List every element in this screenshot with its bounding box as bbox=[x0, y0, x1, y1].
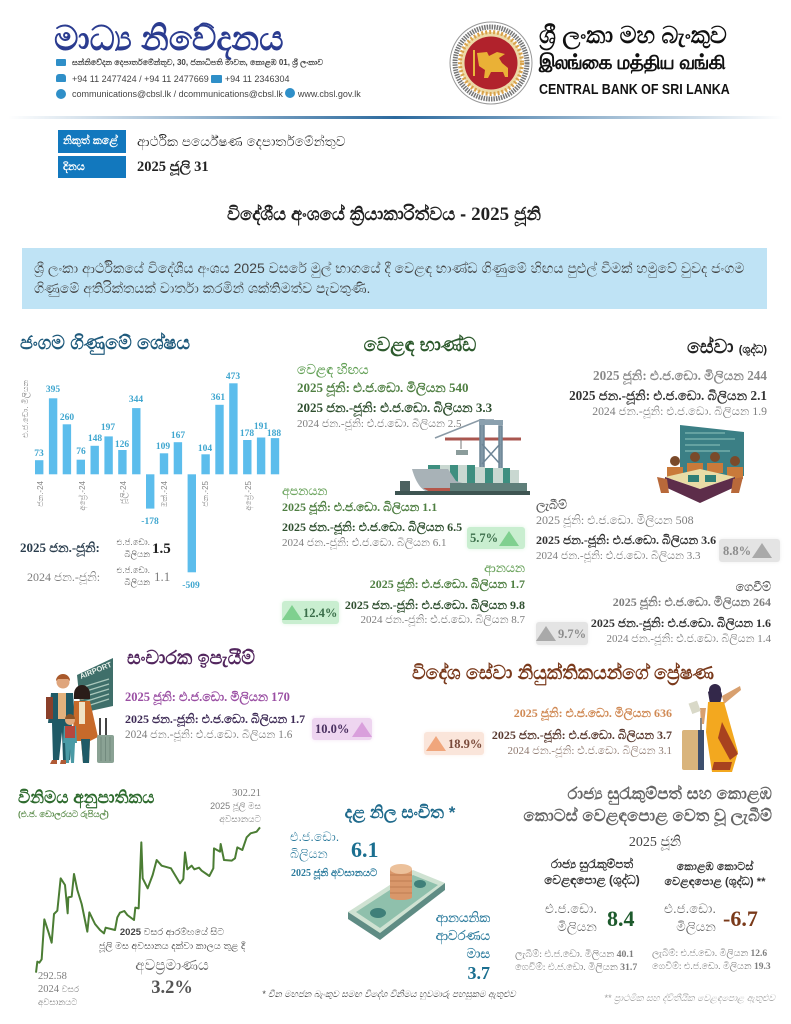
icon: family at airport with luggage bbox=[46, 658, 114, 764]
unit: බිලියන bbox=[124, 577, 150, 587]
bar chart: monthly current account balance: 395 bbox=[46, 385, 60, 395]
receipts figures bbox=[536, 498, 716, 562]
label: මාස bbox=[466, 946, 490, 961]
heading: exchange rate: විනිමය අනුපාතිකය bbox=[18, 788, 154, 807]
column heading: වෙළඳපොළ (ශුද්ධ) ** bbox=[665, 876, 765, 888]
line chart: rupee per dollar bbox=[35, 826, 261, 973]
badge: payments growth bbox=[536, 622, 588, 645]
heading: current account balance: ජංගම ගිණුමේ ශේෂය bbox=[20, 333, 190, 354]
value: 9.7% bbox=[558, 627, 586, 641]
heading: services net: සේවා (ශුද්ධ) bbox=[687, 337, 767, 358]
exports figures bbox=[282, 484, 462, 550]
as-of date: 2025 ජූනි අවසානයට bbox=[291, 868, 377, 879]
label: වෙළඳ හිඟය bbox=[297, 362, 369, 377]
bar chart: monthly current account balance: ජන.-25 bbox=[201, 480, 210, 507]
label: end July 2025: 302.21 bbox=[232, 788, 261, 799]
label: depreciation: අවප්‍රමාණය bbox=[135, 957, 209, 974]
icon: telephone bbox=[56, 74, 66, 82]
badge: imports growth bbox=[282, 601, 339, 624]
footnote: swap: * චීන මහජන බැංකුව සමඟ විදේශ විනිමය හුවමාරු පහසුකම ඇතුළුව bbox=[262, 989, 516, 999]
unit: එ.ජ.ඩො. bbox=[545, 901, 597, 916]
value: 8.8% bbox=[723, 544, 751, 558]
value: 10.0% bbox=[315, 722, 349, 736]
label: issued by: නිකුත් කළේ bbox=[63, 135, 118, 147]
bar chart: monthly current account balance bbox=[21, 372, 281, 591]
icon: at sign bbox=[56, 89, 66, 99]
value: 8.4 bbox=[607, 906, 634, 931]
divider bbox=[8, 116, 783, 119]
icon: up triangle bbox=[752, 543, 772, 558]
heading: inflows: කොටස් වෙළඳපොළ වෙත වූ ලැබීම් bbox=[523, 806, 772, 825]
icon: woman in saree with suitcase bbox=[682, 684, 741, 772]
unit: බිලියන bbox=[290, 847, 328, 861]
unit: එ.ජ.ඩො. bbox=[290, 830, 339, 844]
bar chart: monthly current account balance: 260 bbox=[60, 413, 74, 423]
receipts and payments bbox=[652, 948, 771, 974]
label: end July 2025: අවසානයට bbox=[219, 814, 261, 824]
value: 12.4% bbox=[303, 606, 337, 620]
bar chart: monthly current account balance: -509 bbox=[182, 581, 200, 591]
footnote: primary and secondary markets: ** ප්‍රාථමික සහ ද්විතීයික වෙළඳපොළ ඇතුළුව bbox=[604, 993, 775, 1003]
heading: workers' remittances: විදේශ සේවා නියුක්තිකයන්ගේ ප්‍රේෂණ bbox=[412, 663, 714, 684]
unit bbox=[290, 830, 339, 862]
bar chart: monthly current account balance: 73 bbox=[34, 449, 44, 459]
June 2025: 2025 ජූනි: එ.ජ.ඩො. මිලියන 508 bbox=[536, 513, 694, 527]
Jan-Jun 2025: 2025 ජන.-ජූනි: එ.ජ.ඩො. බිලියන 9.8 bbox=[345, 598, 525, 612]
unit: එ.ජ.ඩො. bbox=[117, 565, 150, 575]
receipts and payments: ගෙවීම්: එ.ජ.ඩො. මිලියන 31.7 bbox=[515, 962, 637, 973]
label: end 2024: අවසානයට bbox=[38, 997, 77, 1007]
label: ආනයනික bbox=[436, 910, 490, 925]
2025 label: 2025 ජන.-ජූනි: bbox=[20, 540, 100, 555]
icon: container ship and port crane bbox=[395, 419, 530, 495]
trade deficit figures bbox=[297, 362, 492, 430]
June 2025: 2025 ජූනි: එ.ජ.ඩො. බිලියන 1.7 bbox=[370, 577, 525, 591]
label: අපනයන bbox=[282, 484, 327, 498]
unit: මිලියන bbox=[676, 919, 716, 934]
depreciation note bbox=[99, 927, 246, 998]
icon: central bank seal bbox=[450, 22, 532, 104]
icon: up triangle bbox=[426, 736, 446, 751]
issuing department: ආර්ථික පර්යේෂණ දෙපාර්තමේන්තුව bbox=[137, 134, 346, 149]
Jan-Jun 2025: 2025 ජන.-ජූනි: එ.ජ.ඩො. බිලියන 1.6 bbox=[591, 616, 771, 630]
main title: විදේශීය අංශයේ ක්‍රියාකාරිත්වය - 2025 ජූනි bbox=[227, 204, 541, 225]
heading: merchandise trade: වෙළඳ භාණ්ඩ bbox=[364, 335, 476, 356]
icon: mail bbox=[56, 59, 66, 66]
badge: tourism growth bbox=[312, 718, 372, 740]
bar chart: monthly current account balance: ජූලි-24 bbox=[119, 480, 129, 505]
June 2025: 2025 ජූනි: එ.ජ.ඩො. මිලියන 170 bbox=[125, 690, 290, 704]
summary box: ගිණුමේ අතිරික්තයක් වාර්තා කරමින් ශක්තිමත්ව පැවතුණි. bbox=[34, 280, 370, 296]
Jan-Jun 2025: 2025 ජන.-ජූනි: එ.ජ.ඩො. බිලියන 3.3 bbox=[297, 400, 492, 415]
bank name in Sinhala: ශ්‍රී ලංකා මහ බැංකුව bbox=[539, 22, 727, 48]
panel: tourism earnings bbox=[46, 648, 373, 764]
June 2025: 2025 ජූනි: එ.ජ.ඩො. බිලියන 1.1 bbox=[282, 500, 437, 514]
column: Colombo stock exchange bbox=[650, 854, 780, 979]
bar chart: monthly current account balance: 76 bbox=[76, 447, 86, 457]
panel: current account balance bbox=[20, 332, 281, 591]
panel: inflows to government securities and stock market bbox=[505, 782, 780, 1007]
bank name in English: CENTRAL BANK OF SRI LANKA bbox=[539, 81, 730, 98]
bar chart: monthly current account balance: එ.ජ.ඩො. මිලියන bbox=[21, 380, 31, 438]
column heading bbox=[650, 860, 780, 890]
phone and fax numbers: +94 11 2477424 / +94 11 2477669 +94 11 2346304 bbox=[72, 74, 289, 84]
June 2025: 2025 ජූනි: එ.ජ.ඩො. මිලියන 636 bbox=[514, 706, 672, 720]
June 2025: 2025 ජූනි: එ.ජ.ඩො. මිලියන 244 bbox=[593, 368, 767, 383]
column heading: වෙළඳපොළ (ශුද්ධ) bbox=[544, 873, 640, 887]
bar chart: monthly current account balance: 361 bbox=[211, 393, 225, 403]
label bbox=[436, 910, 490, 961]
Jan-Jun 2024: 2024 ජන.-ජූනි: එ.ජ.ඩො. බිලියන 1.4 bbox=[607, 633, 771, 645]
icon: up triangle bbox=[352, 722, 372, 737]
2025 value: 1.5 bbox=[152, 541, 171, 557]
Jan-Jun 2024: 2024 ජන.-ජූනි: එ.ජ.ඩො. බිලියන 8.7 bbox=[361, 614, 525, 626]
period: 2025 වසර ආරම්භයේ සිට bbox=[120, 927, 224, 938]
badge: receipts growth bbox=[719, 539, 780, 562]
value: 18.9% bbox=[448, 737, 482, 751]
column heading: කොළඹ කොටස් bbox=[677, 861, 753, 873]
2024 label: 2024 ජන.-ජූනි: bbox=[27, 570, 100, 584]
bar chart: monthly current account balance: 167 bbox=[171, 431, 185, 441]
bar chart: monthly current account balance: අප්‍රේ.-25 bbox=[243, 480, 254, 511]
tourism figures bbox=[125, 690, 305, 742]
value: 5.7% bbox=[470, 531, 498, 545]
bar chart: monthly current account balance: 473 bbox=[226, 372, 240, 382]
panel: gross official reserves bbox=[262, 803, 516, 1000]
title: media release: මාධ්‍ය නිවේදනය bbox=[54, 20, 284, 58]
Jan-Jun 2024: 2024 ජන.-ජූනි: එ.ජ.ඩො. බිලියන 3.1 bbox=[508, 745, 672, 757]
imports figures bbox=[345, 561, 525, 626]
receipts and payments: ලැබීම්: එ.ජ.ඩො. මිලියන 40.1 bbox=[515, 949, 634, 960]
email and web: communications@cbsl.lk / dcommunications@cbsl.lk www.cbsl.gov.lk bbox=[72, 89, 361, 99]
badge: exports growth bbox=[467, 527, 525, 549]
icon: up triangle bbox=[536, 626, 556, 641]
heading: gross official reserves: දළ නිල සංචිත * bbox=[345, 803, 455, 822]
column: government securities bbox=[510, 854, 640, 979]
services figures bbox=[569, 368, 767, 418]
remittances figures bbox=[492, 706, 672, 758]
bar chart: monthly current account balance: -178 bbox=[141, 517, 159, 527]
label: issued by bbox=[58, 130, 126, 153]
current account totals bbox=[20, 537, 171, 588]
payments figures bbox=[591, 580, 771, 646]
column heading: රාජ්‍ය සුරැකුම්පත් bbox=[551, 857, 633, 871]
panel: services bbox=[536, 336, 780, 646]
June 2025: 2025 ජූනි: එ.ජ.ඩො. මිලියන 540 bbox=[297, 380, 468, 395]
bar chart: monthly current account balance: ඔක්.-24 bbox=[159, 480, 169, 507]
date: 2025 ජූලි 31 bbox=[137, 159, 209, 175]
bar chart: monthly current account balance: 148 bbox=[88, 434, 102, 444]
summary box: ශ්‍රී ලංකා ආර්ථිකයේ විදේශීය අංශය 2025 වසරේ මුල් භාගයේ දී වෙළඳ භාණ්ඩ ගිණුමේ හිඟය පුළුල් වීමක් හමුවේ වුවද ජංගම bbox=[34, 260, 744, 276]
unit bbox=[545, 900, 597, 936]
heading: inflows bbox=[523, 783, 772, 827]
Jan-Jun 2025: 2025 ජන.-ජූනි: එ.ජ.ඩො. බිලියන 1.7 bbox=[125, 712, 305, 726]
Jan-Jun 2025: 2025 ජන.-ජූනි: එ.ජ.ඩො. බිලියන 6.5 bbox=[282, 520, 462, 534]
value: -6.7 bbox=[723, 906, 758, 931]
2024 value: 1.1 bbox=[154, 569, 170, 584]
icon: stack of banknotes and coins bbox=[348, 864, 445, 940]
icon: up triangle bbox=[282, 605, 302, 620]
bank name in Tamil: இலங்கை மத்திய வங்கி bbox=[539, 52, 726, 74]
label: ආනයන bbox=[484, 561, 525, 575]
bar chart: monthly current account balance: අප්‍රේ.-24 bbox=[77, 480, 88, 511]
label: ආවරණය bbox=[436, 928, 490, 943]
label: ලැබීම් bbox=[536, 498, 567, 512]
label: end July 2025 bbox=[210, 788, 261, 825]
Jan-Jun 2024: 2024 ජන.-ජූනි: එ.ජ.ඩො. බිලියන 1.9 bbox=[592, 405, 767, 418]
panel: workers' remittances bbox=[412, 662, 741, 772]
address: සන්නිවේදන දෙපාර්තමේන්තුව, 30, ජනාධිපති මාවත, කොළඹ 01, ශ්‍රී ලංකාව bbox=[72, 58, 323, 67]
heading: inflows: රාජ්‍ය සුරැකුම්පත් සහ කොළඹ bbox=[568, 784, 772, 803]
label: end 2024: 292.58 bbox=[38, 971, 67, 982]
icon: up triangle bbox=[499, 531, 519, 546]
icon: meeting around a data screen bbox=[657, 425, 744, 503]
badge: remittances growth bbox=[424, 732, 484, 755]
subheading: rupees per US dollar: (එ.ජ. ඩොලරයට රුපියල්) bbox=[18, 809, 109, 819]
contact details bbox=[56, 58, 361, 99]
label: end 2024 bbox=[38, 971, 79, 1008]
label: end 2024: 2024 වසර bbox=[38, 984, 79, 995]
value: reserves: 6.1 bbox=[351, 837, 378, 862]
bar chart: monthly current account balance: 104 bbox=[198, 444, 212, 454]
period: 2025 ජූනි bbox=[629, 835, 681, 850]
unit bbox=[116, 565, 150, 588]
value: months: 3.7 bbox=[468, 963, 490, 983]
Jan-Jun 2024: 2024 ජන.-ජූනි: එ.ජ.ඩො. බිලියන 1.6 bbox=[125, 729, 292, 741]
Jan-Jun 2024: 2024 ජන.-ජූනි: එ.ජ.ඩො. බිලියන 2.5 bbox=[297, 418, 461, 430]
unit bbox=[664, 900, 716, 936]
period bbox=[99, 927, 246, 952]
issued by and date bbox=[58, 130, 346, 178]
unit: බිලියන bbox=[124, 549, 150, 559]
icon: family at airport with luggage: AIRPORT bbox=[78, 660, 113, 681]
bar chart: monthly current account balance: 126 bbox=[115, 440, 129, 450]
summary box bbox=[22, 248, 767, 309]
panel: merchandise trade bbox=[280, 334, 530, 626]
bar chart: monthly current account balance: 191 bbox=[254, 422, 268, 432]
label: date bbox=[58, 156, 126, 178]
unit bbox=[116, 537, 150, 560]
bar chart: monthly current account balance: 197 bbox=[101, 423, 115, 433]
bar chart: monthly current account balance: 109 bbox=[156, 442, 170, 452]
import cover bbox=[436, 910, 490, 983]
heading: tourism earnings: සංචාරක ඉපැයීම් bbox=[127, 648, 255, 669]
Jan-Jun 2024: 2024 ජන.-ජූනි: එ.ජ.ඩො. බිලියන 3.3 bbox=[536, 550, 700, 562]
bar chart: monthly current account balance: 178 bbox=[240, 429, 254, 439]
bar chart: monthly current account balance: 344 bbox=[129, 395, 143, 405]
header: media release masthead bbox=[23, 20, 768, 119]
bar chart: monthly current account balance: ජන.-24 bbox=[36, 480, 45, 507]
label: ගෙවීම් bbox=[736, 580, 771, 594]
June 2025: 2025 ජූනි: එ.ජ.ඩො. මිලියන 264 bbox=[613, 595, 771, 609]
receipts and payments bbox=[515, 948, 637, 974]
period: ජූලි මස අවසානය දක්වා කාලය තුළ දී bbox=[99, 941, 245, 952]
label: end July 2025: 2025 ජූලි මස bbox=[210, 801, 261, 811]
Jan-Jun 2025: 2025 ජන.-ජූනි: එ.ජ.ඩො. බිලියන 3.7 bbox=[492, 728, 672, 742]
panel: exchange rate bbox=[18, 788, 261, 1008]
unit: එ.ජ.ඩො. bbox=[117, 537, 150, 547]
column heading bbox=[527, 856, 657, 888]
receipts and payments: ලැබීම්: එ.ජ.ඩො. මිලියන 12.6 bbox=[652, 949, 767, 959]
bar chart: monthly current account balance: 188 bbox=[267, 429, 281, 439]
Jan-Jun 2025: 2025 ජන.-ජූනි: එ.ජ.ඩො. බිලියන 3.6 bbox=[536, 533, 716, 547]
Jan-Jun 2025: 2025 ජන.-ජූනි: එ.ජ.ඩො. බිලියන 2.1 bbox=[569, 388, 767, 403]
unit: මිලියන bbox=[557, 919, 597, 934]
Jan-Jun 2024: 2024 ජන.-ජූනි: එ.ජ.ඩො. බිලියන 6.1 bbox=[282, 537, 446, 549]
receipts and payments: ගෙවීම්: එ.ජ.ඩො. මිලියන 19.3 bbox=[652, 962, 771, 972]
value: 3.2% bbox=[151, 978, 193, 998]
label: date: දිනය bbox=[63, 161, 85, 173]
unit: එ.ජ.ඩො. bbox=[664, 901, 716, 916]
